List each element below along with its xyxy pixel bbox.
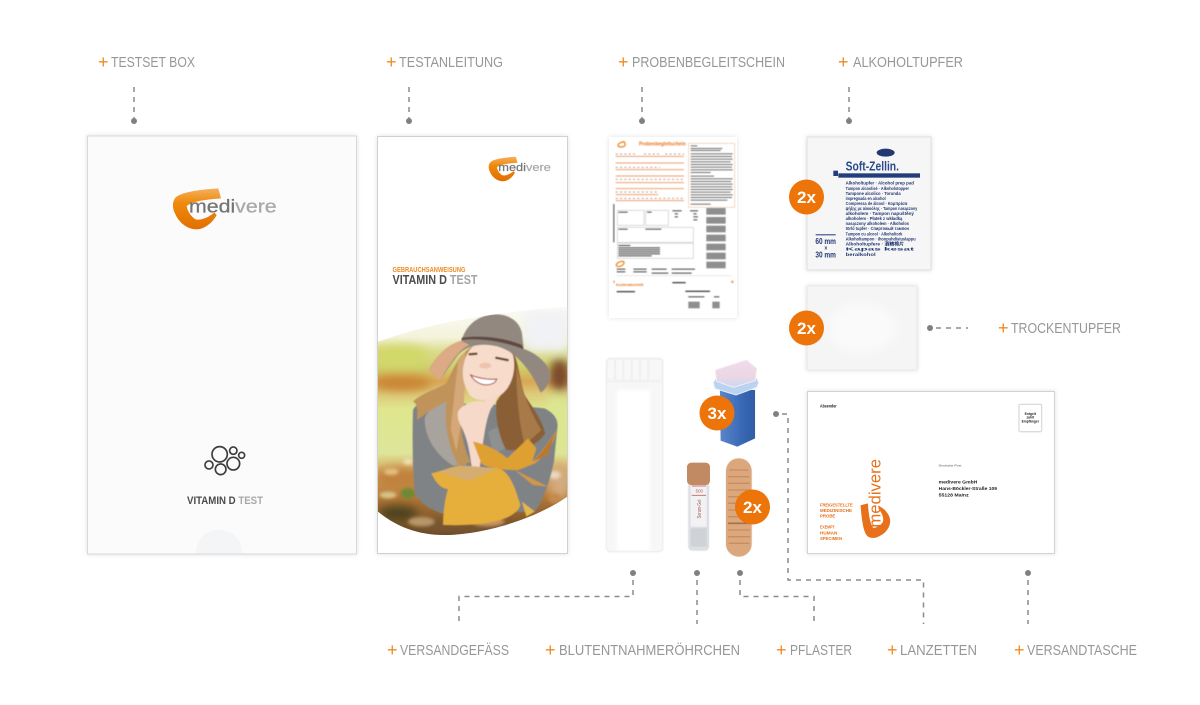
badge: 2x pflaster: 2x (743, 498, 762, 517)
multilingual text block: Tampon alcoolisé · Alkoholstopper (846, 186, 909, 192)
instructions box (689, 143, 735, 207)
connector: Blutentnahmeröhrchen (694, 570, 700, 624)
size marking: 30 mm (815, 250, 836, 259)
orange specimen text: MEDIZINISCHE (820, 508, 852, 513)
orange specimen text: SPECIMEN (820, 536, 842, 541)
coat (413, 402, 558, 513)
label: Testanleitung: TESTANLEITUNG (399, 55, 503, 71)
text: Vitamin D Test: VITAMIN D TEST (392, 273, 478, 287)
orange logo vertical: medivere (865, 459, 884, 528)
sender text: Absender (820, 404, 837, 409)
label: Testanleitung (386, 52, 503, 72)
multilingual text block: Alkoholtupfer · Alcohol prep pad (846, 181, 914, 187)
size marking: x (824, 245, 827, 251)
hair back right (496, 352, 545, 450)
badge: 3x lanzetten: 3x (708, 404, 727, 423)
label: Pflaster: PFLASTER (790, 643, 852, 659)
label: Blutentnahmeröhrchen: + (545, 640, 556, 660)
hand (458, 394, 497, 469)
stamp box: Empfänger (1022, 420, 1040, 424)
logo: medivere small: medivere (498, 162, 551, 174)
connector: Pflaster (737, 570, 814, 624)
label: Trockentupfer: + (998, 318, 1009, 338)
badge: 2x trockentupfer: 2x (797, 319, 816, 338)
panel: lanzette (713, 360, 759, 447)
connector: Lanzetten (773, 411, 924, 624)
multilingual text block: Tampone alcolico · Torunda (846, 191, 901, 197)
multilingual text block: Tampon cu alcool · Alkoholtork (846, 231, 903, 237)
heading: Vitamin D Test: VITAMIN D TEST (187, 495, 263, 507)
leaves (431, 466, 520, 525)
label: Testanleitung: + (386, 52, 397, 72)
address: 55128 Mainz (939, 493, 969, 499)
stamp box: zahlt (1027, 416, 1035, 420)
notch (196, 530, 242, 553)
multilingual text block: Kapas kesat (846, 247, 915, 253)
orange specimen text: FREIGESTELLTE (820, 502, 853, 507)
panel: testanleitung (368, 136, 571, 554)
multilingual text block: Compressa de álcool · Κομπρέσα (846, 201, 907, 207)
label: Trockentupfer: TROCKENTUPFER (1011, 321, 1121, 337)
label: Versandtasche (1014, 640, 1137, 660)
multilingual text block (846, 181, 918, 258)
label: Lanzetten: + (887, 640, 898, 660)
connector: Testset Box (131, 87, 137, 124)
multilingual text block: impregnada en alcohol (846, 196, 886, 202)
ground leaves (384, 468, 399, 475)
label: Probenbegleitschein (618, 52, 785, 72)
label: Testset Box: + (98, 52, 109, 72)
orange field rows (616, 156, 684, 201)
label: Versandtasche: + (1014, 640, 1025, 660)
label: Blutentnahmeröhrchen (545, 640, 740, 660)
multilingual text block: Alkoholtupfere · 酒精棉片 (846, 240, 904, 247)
label: Versandgefäss: VERSANDGEFÄSS (400, 642, 509, 659)
label: Testset Box: TESTSET BOX (111, 55, 195, 71)
badge: 2x pflaster (735, 490, 770, 524)
connector: Trockentupfer (927, 325, 968, 331)
size marking (815, 234, 836, 259)
label: Testset Box (98, 52, 195, 72)
label: Pflaster: + (776, 640, 787, 660)
face (463, 345, 514, 400)
multilingual text block: alkoholem · Tampon napuštěný (846, 211, 914, 217)
stamp box (1019, 404, 1042, 432)
connector: Testanleitung (406, 87, 412, 124)
label: Versandgefäss (387, 640, 509, 660)
icon: vitamin D molecules (205, 447, 245, 475)
section heading: Kundenabschnitt (616, 283, 644, 287)
label: Lanzetten (887, 640, 977, 660)
multilingual text block: alkoholem · Płatek z wkładką (846, 216, 903, 222)
badge: 3x lanzetten (700, 396, 734, 430)
panel: versandgefäss bottle (607, 358, 663, 552)
label: Probenbegleitschein: + (618, 52, 629, 72)
orange specimen text: PROBE (820, 514, 835, 519)
barcodes (688, 208, 726, 308)
panel: probenbegleitschein (609, 137, 737, 318)
photo: woman with hat and autumn leaves (368, 305, 571, 537)
stamp box: Entgelt (1025, 412, 1037, 416)
product name: Soft-Zellin. (846, 160, 899, 174)
label: Pflaster (776, 640, 852, 660)
panel: blutentnahmeröhrchen (687, 463, 710, 551)
panel: blutentnahmeröhrchen: Serum-Gel (697, 500, 703, 518)
form title: Probenbegleitschein (639, 142, 686, 148)
address (939, 480, 997, 499)
panel: testset box (88, 136, 356, 554)
address: Hans-Böckler-Straße 109 (939, 486, 997, 492)
label: Alkoholtupfer: + (838, 52, 849, 72)
orange specimen text (820, 502, 853, 541)
Deutsche Post: Deutsche Post (939, 463, 962, 467)
connector: Alkoholtupfer (846, 87, 852, 124)
logo: medivere small (489, 157, 551, 181)
badge: 2x alkoholtupfer (789, 180, 824, 214)
logo: medivere: medivere (189, 195, 277, 216)
multilingual text block: Alkoholtampon · Ihonpuhdistuslappu (846, 236, 916, 242)
label: Lanzetten: LANZETTEN (900, 643, 977, 659)
form boxes (617, 210, 693, 258)
tube label (692, 486, 706, 495)
address: medivere GmbH (939, 480, 978, 486)
label: Blutentnahmeröhrchen: BLUTENTNAHMERÖHRCHEN (559, 641, 740, 659)
panel: trockentupfer (807, 286, 917, 370)
badge: 2x alkoholtupfer: 2x (797, 188, 816, 207)
blue band (833, 171, 838, 176)
connector: Versandtasche (1025, 570, 1031, 624)
panel: pflaster (726, 458, 752, 557)
badge: 2x trockentupfer (789, 310, 824, 346)
logo: medivere (173, 188, 277, 229)
multilingual text block: beralkohol (846, 252, 876, 258)
size marking: 60 mm (815, 237, 836, 246)
hat (429, 314, 551, 393)
orange specimen text: HUMAN (820, 530, 837, 535)
label: Alkoholtupfer: ALKOHOLTUPFER (853, 55, 963, 71)
brand oval (877, 149, 895, 157)
orange logo vertical (861, 459, 890, 538)
connector: Probenbegleitschein (639, 87, 645, 124)
label: Versandgefäss: + (387, 640, 398, 660)
panel: versandtasche (808, 392, 1054, 554)
multilingual text block: törlő tupfer · Спиртовый тампон (846, 225, 909, 232)
form logo (618, 142, 625, 147)
scarf (425, 400, 466, 466)
label: Alkoholtupfer (838, 52, 963, 72)
connector: Versandgefäss (459, 570, 636, 624)
multilingual text block: ψήξης με αλκοόλης · Tampon nasączony (846, 206, 918, 212)
label: Probenbegleitschein: PROBENBEGLEITSCHEIN (632, 55, 785, 71)
label: Versandtasche: VERSANDTASCHE (1027, 643, 1137, 659)
label: Trockentupfer (998, 318, 1121, 338)
panel: blutentnahmeröhrchen: 500 (696, 488, 703, 493)
multilingual text block: nasączony alkoholem · Alkoholos (846, 221, 909, 227)
orange specimen text: EXEMPT (820, 525, 835, 530)
hair left (413, 346, 473, 467)
panel: alkoholtupfer (807, 137, 931, 270)
text: Gebrauchsanweisung: GEBRAUCHSANWEISUNG (392, 265, 466, 274)
